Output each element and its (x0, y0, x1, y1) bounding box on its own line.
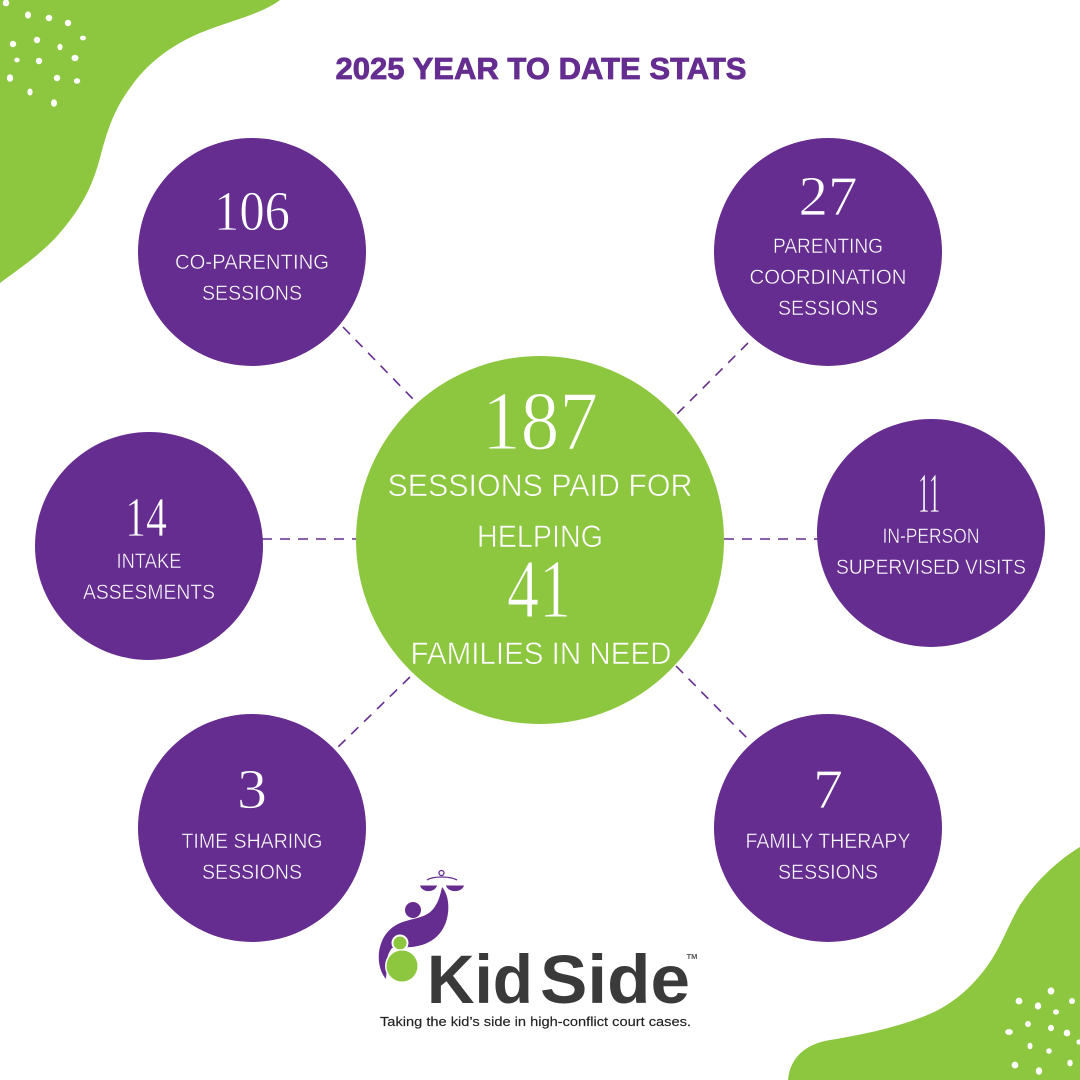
panel: intake assessments: ASSESMENTS (83, 581, 215, 604)
panel: family therapy sessions: 7 (813, 759, 843, 821)
panel: intake assessments: INTAKE (116, 550, 182, 573)
panel: family therapy sessions: FAMILY THERAPY (746, 830, 910, 853)
panel: time sharing sessions (138, 714, 366, 942)
panel: time sharing sessions: 3 (237, 759, 267, 821)
trademark: TM (687, 952, 697, 961)
panel: intake assessments: 14 (125, 487, 167, 549)
panel: in-person supervised visits: 11 (918, 463, 940, 525)
panel: central total: HELPING (477, 518, 603, 554)
panel: co-parenting sessions: SESSIONS (202, 282, 302, 305)
panel: central total (356, 356, 724, 724)
panel: time sharing sessions: TIME SHARING (182, 830, 322, 853)
dashed connectors (262, 327, 818, 748)
panel: parenting coordination sessions: SESSIONS (778, 297, 878, 320)
panel: parenting coordination sessions: 27 (798, 166, 858, 228)
icon: scales and figures (379, 870, 464, 983)
panel: parenting coordination sessions (714, 138, 942, 366)
logo: KidSide (379, 870, 697, 1029)
panel: co-parenting sessions: CO-PARENTING (175, 251, 329, 274)
panel: co-parenting sessions (138, 138, 366, 366)
panel: in-person supervised visits (817, 419, 1045, 647)
panel: time sharing sessions: SESSIONS (202, 861, 302, 884)
panel: in-person supervised visits: SUPERVISED VISITS (836, 556, 1026, 579)
panel: central total: 187 (482, 375, 598, 468)
panel: family therapy sessions (714, 714, 942, 942)
panel: family therapy sessions: SESSIONS (778, 861, 878, 884)
panel: intake assessments (35, 432, 263, 660)
tagline: Taking the kid’s side in high-conflict court cases. (380, 1015, 691, 1029)
panel: parenting coordination sessions: COORDINATION (750, 266, 906, 289)
logo: KidSide: Side (540, 941, 690, 1018)
panel: co-parenting sessions: 106 (214, 181, 290, 243)
panel: parenting coordination sessions: PARENTING (773, 235, 883, 258)
panel: central total: SESSIONS PAID FOR (388, 467, 692, 503)
decorative blob: bottom right (788, 847, 1080, 1080)
decorative blob: top left (0, 0, 280, 283)
panel: central total: FAMILIES IN NEED (410, 635, 672, 671)
panel: in-person supervised visits: IN-PERSON (882, 525, 980, 548)
wordmark: Kid (427, 941, 533, 1018)
title: 2025 YEAR TO DATE STATS (336, 52, 746, 86)
panel: central total: 41 (507, 543, 571, 636)
